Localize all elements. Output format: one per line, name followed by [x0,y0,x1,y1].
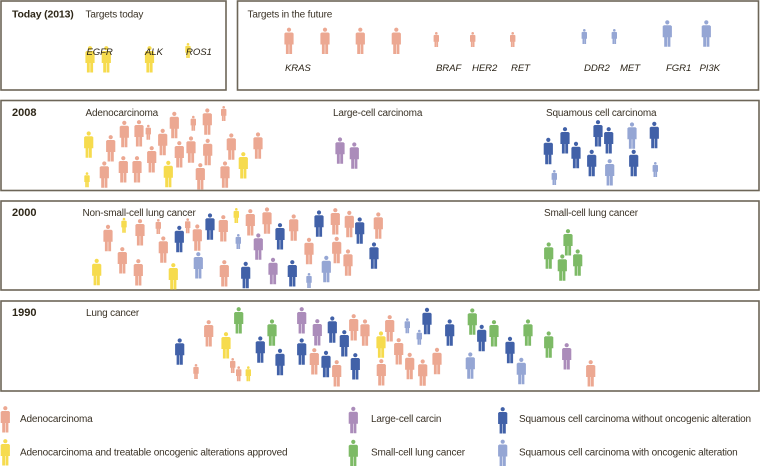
heading: adenocarcinoma: Adenocarcinoma [86,108,159,119]
icons: 1990 small-cell [234,307,553,358]
year heading: 2008: 2008 [12,107,36,119]
legend item: adenocarcinoma and treatable alterations [1,439,287,466]
legend item: adenocarcinoma [1,406,93,432]
icons: 2008 adenocarcinoma [100,106,263,190]
icons: 1990 treatable adenocarcinoma [221,331,386,381]
icons: 1990 large-cell [297,307,571,370]
heading: lung cancer: Lung cancer [86,308,140,319]
icons: 2008 treatable adenocarcinoma [84,131,248,187]
icons: 2008 squamous with alteration [552,122,658,186]
legend item: squamous without alteration: Squamous cell carcinoma without oncogenic alteration [519,414,751,425]
heading: large-cell carcinoma: Large-cell carcinoma [333,108,423,119]
gene labels: future: RET [511,63,531,74]
icons: 2008 large-cell [335,137,359,169]
legend item: squamous without alteration [498,407,751,434]
icons: blue future targets [582,20,711,47]
panel: 2008 [1,100,759,190]
year heading: 1990: 1990 [12,307,36,319]
legend item: small-cell: Small-cell lung cancer [371,448,466,458]
gene labels: future: DDR2 [584,63,610,74]
year heading: 2000: 2000 [12,207,36,219]
panel: today 2013 [1,1,226,90]
gene labels: today [86,47,212,58]
legend item: squamous with alteration: Squamous cell carcinoma with oncogenic alteration [519,448,738,458]
gene labels: future: HER2 [472,63,498,74]
gene labels: future [285,63,721,74]
heading: targets today: Targets today [86,10,143,20]
icons: 2000 squamous without alteration [175,210,379,288]
icons: 1990 adenocarcinoma [193,314,595,386]
heading: non-small-cell lung cancer: Non-small-cell lung cancer [82,208,196,219]
icons: 2000 treatable adenocarcinoma [92,208,239,290]
panel: 1990 [1,301,759,391]
heading: targets in the future: Targets in the future [248,10,333,20]
panel: targets in the future [238,1,758,90]
gene labels: future: PI3K [700,63,721,74]
legend item: small-cell [349,440,466,466]
icons: yellow target figures [85,43,191,72]
gene labels: future: FGR1 [666,63,691,74]
icons: 1990 squamous with alteration [405,318,526,384]
legend item: adenocarcinoma: Adenocarcinoma [20,414,93,425]
icons: 2000 small-cell [544,229,582,281]
legend item: large-cell: Large-cell carcin [371,414,441,425]
heading: small-cell lung cancer: Small-cell lung cancer [544,208,639,219]
heading: squamous cell carcinoma: Squamous cell carcinoma [546,108,657,119]
legend item: squamous with alteration [498,440,738,466]
legend item: adenocarcinoma and treatable alterations: Adenocarcinoma and treatable oncogenic alterations approved [20,448,287,458]
year heading: today: Today (2013) [12,8,74,20]
icons: 2008 squamous without alteration [544,120,659,176]
legend [1,406,751,466]
panel: 2000 [1,201,759,290]
gene labels: today: ALK [144,47,164,58]
gene labels: future: BRAF [436,63,462,74]
gene labels: future: KRAS [285,63,311,74]
icons: 1990 squamous without alteration [175,308,515,380]
gene labels: today: EGFR [86,47,113,58]
icons: 2000 large-cell [254,233,278,284]
icons: 2000 squamous with alteration [194,234,331,288]
legend item: large-cell [349,407,441,433]
icons: salmon future targets [284,28,515,54]
gene labels: future: MET [620,63,641,74]
gene labels: today: ROS1 [186,47,212,58]
icons: 2000 adenocarcinoma [103,207,383,286]
